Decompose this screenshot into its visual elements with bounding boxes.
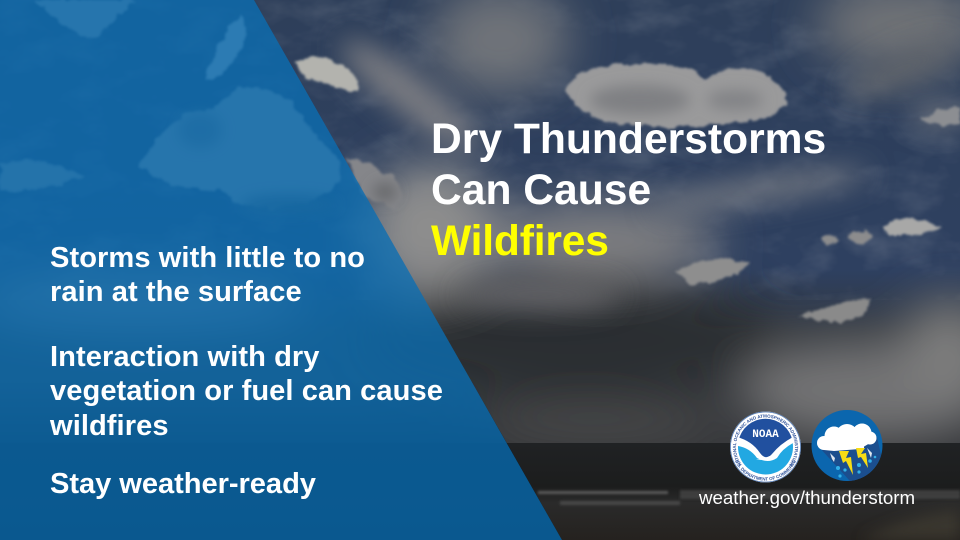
logo: thunderstorm icon: [812, 410, 882, 481]
text: dry vegetation: [50, 340, 443, 442]
logo: NOAA seal: NATIONAL OCEANIC AND ATMOSPHERIC ADMINISTRATION: [732, 414, 798, 466]
text: dry vegetation: vegetation or fuel can cause: [50, 375, 443, 407]
text: dry vegetation: wildfires: [50, 410, 169, 442]
clouds: [0, 0, 960, 322]
logo: NOAA seal: U.S. DEPARTMENT OF COMMERCE: [735, 460, 796, 481]
text: little to no rain: Storms with little to no: [50, 242, 365, 274]
text: little to no rain: [50, 242, 365, 308]
photo: ground: [0, 380, 960, 540]
rain drops: [836, 456, 876, 478]
title: [431, 115, 826, 265]
title: Dry Thunderstorms: [431, 115, 826, 163]
title: Can Cause: [431, 166, 651, 214]
cloud: [817, 424, 876, 451]
logo: NOAA seal: NOAA: [752, 429, 779, 441]
text: little to no rain: rain at the surface: [50, 276, 302, 308]
text: dry vegetation: Interaction with dry: [50, 340, 320, 372]
title: Wildfires: [431, 217, 609, 265]
blue diagonal panel: [0, 0, 562, 540]
text: stay weather-ready: Stay weather-ready: [50, 468, 316, 500]
website link: weather.gov/thunderstorm: [699, 487, 915, 508]
lightning bolts: [839, 451, 853, 475]
